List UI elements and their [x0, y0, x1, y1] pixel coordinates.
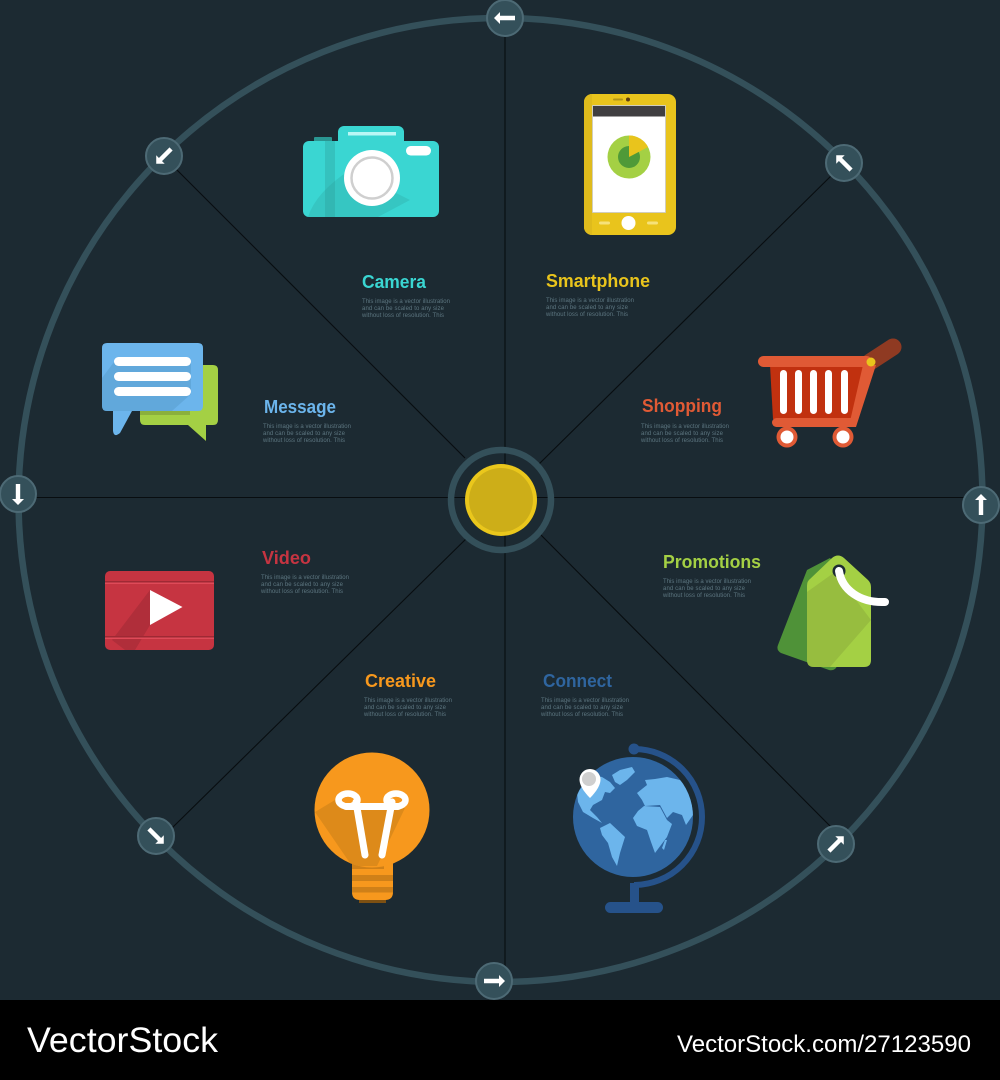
heading: creative: Creative — [365, 671, 436, 691]
icon: shopping cart — [758, 347, 893, 448]
text: connect description: without loss of resolution. This — [540, 712, 623, 718]
footer band — [0, 1000, 1000, 1080]
text: camera description: without loss of resolution. This — [361, 313, 444, 319]
footer: image url: VectorStock.com/27123590 — [677, 1031, 971, 1058]
icon: camera — [303, 126, 439, 217]
arrow node: right — [963, 487, 999, 523]
arrow node: top — [487, 0, 523, 36]
heading: video: Video — [262, 548, 311, 568]
text: video description: This image is a vector illustration — [261, 575, 349, 581]
arrow node: left — [0, 476, 36, 512]
text: creative description: This image is a vector illustration — [364, 698, 452, 704]
text: message description: without loss of resolution. This — [262, 438, 345, 444]
heading: smartphone: Smartphone — [546, 271, 650, 291]
text: smartphone description — [545, 298, 634, 318]
text: camera description: and can be scaled to any size — [362, 306, 445, 312]
text: message description: and can be scaled to any size — [263, 431, 346, 437]
text: smartphone description: and can be scaled to any size — [546, 305, 629, 311]
icon: smartphone — [584, 94, 676, 235]
heading: shopping: Shopping — [642, 396, 722, 416]
arrow node: lower left — [138, 818, 174, 854]
text: camera description: This image is a vector illustration — [362, 299, 450, 305]
arrow node: lower right — [818, 826, 854, 862]
arrow node: upper left — [146, 138, 182, 174]
icon: message bubbles — [102, 343, 218, 441]
footer: brand name: VectorStock — [27, 1020, 218, 1060]
heading: promotions: Promotions — [663, 552, 761, 572]
text: creative description — [363, 698, 452, 718]
text: message description — [262, 424, 351, 444]
heading: connect: Connect — [543, 671, 612, 691]
heading: message: Message — [264, 397, 336, 417]
arrow node: bottom — [476, 963, 512, 999]
text: smartphone description: This image is a vector illustration — [546, 298, 634, 304]
text: shopping description: This image is a vector illustration — [641, 424, 729, 430]
text: creative description: without loss of resolution. This — [363, 712, 446, 718]
text: promotions description: and can be scaled to any size — [663, 586, 746, 592]
text: video description: and can be scaled to any size — [261, 582, 344, 588]
text: promotions description: This image is a vector illustration — [663, 579, 751, 585]
heading: camera: Camera — [362, 272, 427, 292]
text: video description: without loss of resolution. This — [260, 589, 343, 595]
text: shopping description — [640, 424, 729, 444]
center hub — [451, 450, 551, 550]
icon: globe — [573, 744, 702, 913]
icon: video player — [105, 571, 214, 650]
text: promotions description — [662, 579, 751, 599]
text: camera description — [361, 299, 450, 319]
text: shopping description: without loss of resolution. This — [640, 438, 723, 444]
arrow node: upper right — [826, 145, 862, 181]
icon: light bulb — [314, 752, 430, 903]
text: connect description: and can be scaled to any size — [541, 705, 624, 711]
text: promotions description: without loss of resolution. This — [662, 593, 745, 599]
text: smartphone description: without loss of resolution. This — [545, 312, 628, 318]
icon: price tags — [777, 556, 885, 670]
text: creative description: and can be scaled to any size — [364, 705, 447, 711]
text: connect description — [540, 698, 629, 718]
text: shopping description: and can be scaled to any size — [641, 431, 724, 437]
text: video description — [260, 575, 349, 595]
text: message description: This image is a vector illustration — [263, 424, 351, 430]
text: connect description: This image is a vector illustration — [541, 698, 629, 704]
